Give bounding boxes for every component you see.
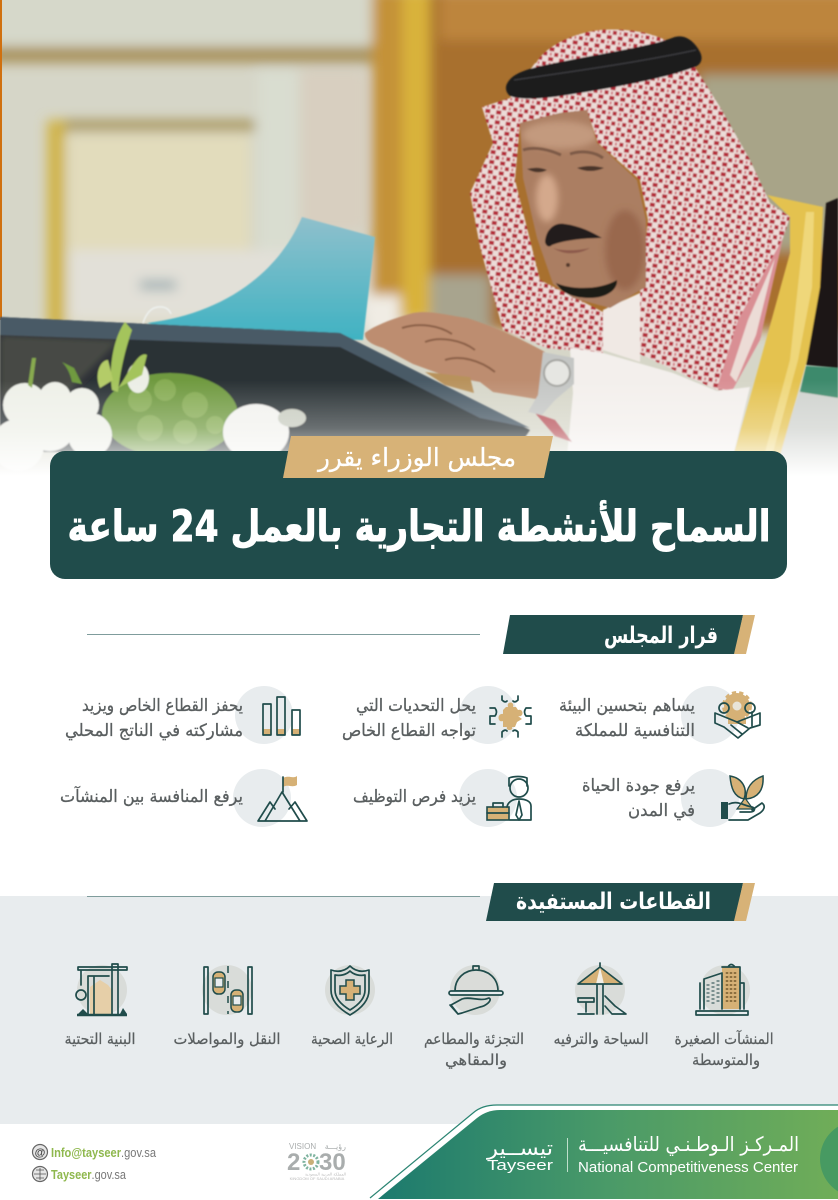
- icon: parasol and lounger: [578, 963, 626, 1014]
- label: [674, 1030, 774, 1069]
- hero photo: king at cabinet desk: [0, 0, 838, 476]
- label: الرعاية الصحية: [311, 1030, 393, 1048]
- icon: cars on road: [204, 966, 252, 1014]
- sector: transport: [174, 965, 280, 1048]
- label: والمقاهي: [445, 1051, 507, 1070]
- decision item: private sector growth: [65, 686, 300, 744]
- text: [559, 696, 695, 741]
- section heading: beneficiary sectors: [87, 883, 755, 921]
- ghutra: [470, 63, 790, 390]
- contact details: [32, 1144, 157, 1182]
- text: تواجه القطاع الخاص: [342, 721, 476, 741]
- text: يساهم بتحسين البيئة: [559, 696, 695, 716]
- text: مشاركته في الناتج المحلي: [65, 721, 243, 741]
- vision 2030 logo: 30: [319, 1149, 346, 1176]
- title ribbon: مجلس الوزراء يقرر: [316, 443, 516, 472]
- decision item: employment: [353, 769, 531, 827]
- title panel: [50, 436, 787, 579]
- tayseer logo: Tayseer: [487, 1157, 553, 1174]
- email: Info@tayseer.gov.sa: [51, 1145, 157, 1160]
- tayseer logo: تيســير: [486, 1136, 553, 1160]
- label: المنشآت الصغيرة: [674, 1030, 774, 1048]
- photo fade: [0, 380, 838, 476]
- blue paper: [147, 217, 375, 340]
- section heading: council decision: قرار المجلس: [604, 623, 718, 649]
- sector: infrastructure: [64, 964, 136, 1048]
- decision item: competitive environment: [559, 686, 760, 744]
- red cuff tail: [535, 413, 572, 442]
- vision 2030 logo: VISION: [289, 1142, 316, 1151]
- sector: retail, restaurants and cafes: [424, 965, 524, 1070]
- icon: gear and handshake: [715, 693, 760, 738]
- title ribbon: [283, 436, 553, 478]
- vision 2030 logo: 2: [287, 1149, 300, 1176]
- watch: [528, 352, 574, 415]
- hand: [365, 312, 545, 400]
- thobe collar: [603, 292, 642, 362]
- icon: employee with briefcase: [487, 776, 531, 820]
- icon: buildings: [696, 964, 748, 1015]
- label: السياحة والترفيه: [554, 1030, 648, 1048]
- panel: beneficiary sectors: [0, 883, 838, 1124]
- icon: bars: [263, 697, 300, 735]
- vision 2030 logo: رؤيـــة: [325, 1142, 346, 1151]
- text: يحفز القطاع الخاص ويزيد: [82, 696, 243, 716]
- website: Tayseer.gov.sa: [51, 1167, 127, 1182]
- black bisht: [806, 198, 838, 368]
- section heading: council decision: [87, 615, 755, 654]
- decision item: quality of life: [582, 769, 764, 827]
- text: يرفع جودة الحياة: [582, 776, 695, 796]
- text: يرفع المنافسة بين المنشآت: [60, 785, 243, 807]
- vision 2030 logo: [287, 1142, 346, 1181]
- icon: crane and building: [76, 964, 127, 1015]
- decision item: private sector challenges: [342, 686, 531, 744]
- gold trim: [733, 195, 823, 456]
- vision 2030 logo: 0: [304, 1149, 317, 1176]
- vision 2030 logo: المملكة العربية السعودية: [305, 1172, 346, 1176]
- face shading: [522, 121, 645, 290]
- section heading: beneficiary sectors: القطاعات المستفيدة: [516, 889, 711, 915]
- label: النقل والمواصلات: [174, 1030, 280, 1048]
- pink hem: [717, 238, 783, 391]
- text: [65, 696, 243, 741]
- moustache, beard, eyes: [545, 224, 602, 246]
- label: والمتوسطة: [692, 1051, 760, 1069]
- flowers: [0, 322, 306, 471]
- footer green band: [370, 1105, 838, 1200]
- decision item: competition: [60, 769, 307, 827]
- sector: tourism and entertainment: [554, 963, 648, 1048]
- text: يحل التحديات التي: [356, 696, 476, 716]
- face: [520, 110, 646, 308]
- center name: [578, 1132, 799, 1176]
- vision 2030 logo: KINGDOM OF SAUDI ARABIA: [290, 1176, 345, 1181]
- text: التنافسية للمملكة: [575, 721, 695, 741]
- sector: healthcare: [311, 965, 393, 1048]
- sector: small and medium enterprises: [674, 964, 774, 1069]
- label: [424, 1030, 524, 1070]
- icon: serving cloche: [449, 966, 503, 1014]
- icon: mountain flag: [258, 776, 307, 821]
- tablet: [0, 317, 530, 452]
- center name: المـركـز الـوطـنـي للتنافسيـــة: [578, 1132, 799, 1157]
- text: [342, 696, 476, 741]
- text: يزيد فرص التوظيف: [353, 787, 476, 807]
- agal and head cloth: [535, 30, 672, 66]
- email: @: [35, 1147, 46, 1159]
- text: في المدن: [628, 801, 695, 821]
- tayseer logo: [486, 1136, 553, 1174]
- icon: hand and plant: [721, 776, 764, 820]
- center name: National Competitiveness Center: [578, 1159, 798, 1176]
- text: [582, 776, 695, 821]
- sleeve: [567, 348, 750, 456]
- icon: shield with cross: [331, 966, 369, 1015]
- label: التجزئة والمطاعم: [424, 1030, 524, 1048]
- icon: puzzle: [490, 696, 531, 737]
- label: البنية التحتية: [64, 1030, 136, 1048]
